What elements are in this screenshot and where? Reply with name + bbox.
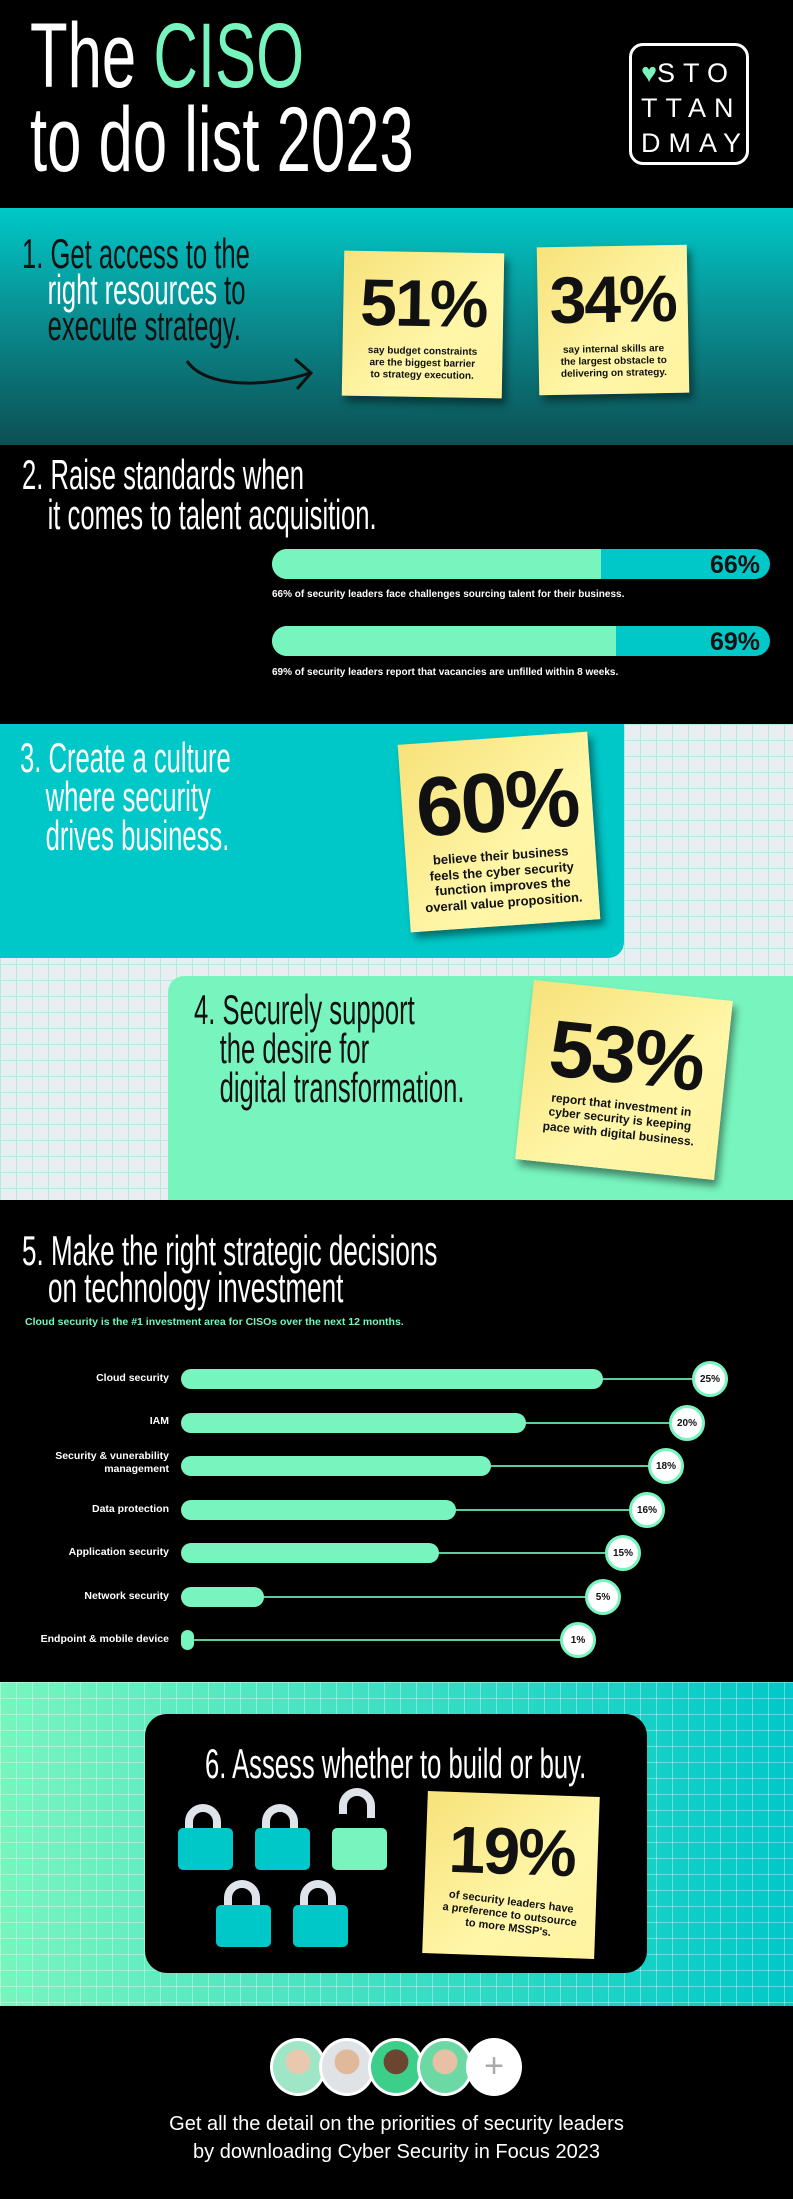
- logo: [629, 43, 749, 165]
- heading 5: on technology investment: [48, 1264, 343, 1311]
- sticky 51%: [342, 251, 504, 398]
- sticky 60%: overall value proposition.: [425, 889, 583, 915]
- bar chart: [41, 1361, 728, 1658]
- sticky 19%: of security leaders have: [448, 1888, 574, 1916]
- title: to do list 2023: [30, 89, 414, 191]
- sticky 60%: feels the cyber security: [429, 858, 574, 884]
- bar chart: 15%: [613, 1548, 633, 1558]
- heading 4: digital transformation.: [220, 1064, 465, 1111]
- avatars: +: [484, 2047, 504, 2085]
- logo: DMAY: [641, 128, 749, 158]
- bar chart: 25%: [700, 1374, 720, 1384]
- bar chart: Cloud security: [96, 1372, 169, 1384]
- bar 66%: [272, 549, 770, 579]
- bar chart: management: [104, 1463, 169, 1475]
- sticky 53%: 53%: [545, 1003, 708, 1108]
- bar chart: 16%: [637, 1504, 657, 1516]
- bar 69%: 69%: [710, 628, 760, 656]
- bar chart: 5%: [596, 1592, 610, 1602]
- heading 4: 4. Securely support: [194, 986, 415, 1033]
- footer text: by downloading Cyber Security in Focus 2023: [193, 2141, 600, 2163]
- panel 4: [168, 976, 793, 1200]
- bar chart: Endpoint & mobile device: [41, 1633, 169, 1645]
- sticky 51%: 51%: [360, 265, 487, 341]
- sticky 53%: [515, 980, 733, 1180]
- footer text: [169, 2113, 624, 2163]
- bar chart: Application security: [69, 1546, 169, 1558]
- heading 6: 6. Assess whether to build or buy.: [205, 1740, 586, 1787]
- sticky 51%: say budget constraints: [368, 345, 477, 358]
- bar 66%: 66%: [710, 551, 760, 579]
- footer: [0, 2006, 793, 2199]
- logo: TTAN: [641, 93, 742, 123]
- section 2: [0, 445, 793, 724]
- bar chart: 1%: [571, 1634, 585, 1646]
- icon: locks: [178, 1788, 387, 1947]
- grid background 3-4: [0, 724, 793, 1200]
- bar 69%: [272, 626, 770, 656]
- sticky 34%: delivering on strategy.: [561, 367, 667, 380]
- bar chart: Security & vunerability: [55, 1450, 169, 1462]
- sticky 34%: [537, 245, 689, 395]
- sticky 19%: a preference to outsource: [442, 1901, 577, 1929]
- footer text: Get all the detail on the priorities of security leaders: [169, 2113, 624, 2135]
- heading 4: [194, 986, 465, 1111]
- sticky 19%: [422, 1791, 600, 1959]
- avatars: [270, 2038, 522, 2096]
- heading 3: where security: [46, 773, 211, 820]
- sticky 34%: say internal skills are: [563, 343, 664, 356]
- panel 6: [145, 1714, 647, 1973]
- heading 3: drives business.: [46, 812, 229, 859]
- heading 1: execute strategy.: [48, 302, 241, 349]
- arrow: [186, 358, 313, 390]
- sticky 34%: 34%: [549, 261, 676, 337]
- bar chart: IAM: [150, 1415, 169, 1427]
- heading 1: right resources to: [48, 266, 246, 313]
- sticky 60%: believe their business: [432, 843, 569, 868]
- heading 2: it comes to talent acquisition.: [48, 491, 377, 538]
- sticky 34%: the largest obstacle to: [561, 355, 667, 368]
- heading 3: 3. Create a culture: [20, 734, 231, 781]
- header: [0, 0, 793, 208]
- sticky 51%: are the biggest barrier: [369, 357, 475, 370]
- bar chart: 18%: [656, 1460, 676, 1472]
- sticky 53%: report that investment in: [551, 1091, 692, 1119]
- heading 1: 1. Get access to the: [22, 230, 250, 277]
- sticky 53%: cyber security is keeping: [548, 1105, 692, 1134]
- bar chart: Data protection: [92, 1503, 169, 1515]
- section 1: [0, 208, 793, 445]
- panel 3: [0, 724, 624, 958]
- sticky 60%: function improves the: [435, 874, 571, 899]
- caption 69: 69% of security leaders report that vacancies are unfilled within 8 weeks.: [272, 667, 618, 678]
- bar chart: 20%: [677, 1418, 697, 1428]
- section 5: [0, 1200, 793, 1682]
- heading 1: [22, 230, 250, 349]
- heading 5: 5. Make the right strategic decisions: [22, 1227, 437, 1274]
- heading 2: 2. Raise standards when: [22, 451, 304, 498]
- heading 2: [22, 451, 377, 538]
- subtitle: Cloud security is the #1 investment area for CISOs over the next 12 months.: [25, 1316, 404, 1328]
- sticky 19%: to more MSSP's.: [464, 1917, 552, 1939]
- caption 66: 66% of security leaders face challenges sourcing talent for their business.: [272, 589, 624, 600]
- bar chart: Network security: [84, 1590, 169, 1602]
- sticky 60%: [398, 732, 600, 932]
- heading 4: the desire for: [220, 1025, 369, 1072]
- sticky 51%: to strategy execution.: [370, 369, 474, 382]
- logo: ♥STO: [641, 58, 736, 88]
- title: The CISO: [30, 5, 304, 107]
- sticky 53%: pace with digital business.: [542, 1119, 695, 1148]
- heading 5: [22, 1227, 437, 1311]
- section 6 background: [0, 1682, 793, 2006]
- title: [30, 5, 414, 191]
- heading 3: [20, 734, 231, 859]
- sticky 19%: 19%: [448, 1812, 576, 1890]
- sticky 60%: 60%: [413, 750, 581, 855]
